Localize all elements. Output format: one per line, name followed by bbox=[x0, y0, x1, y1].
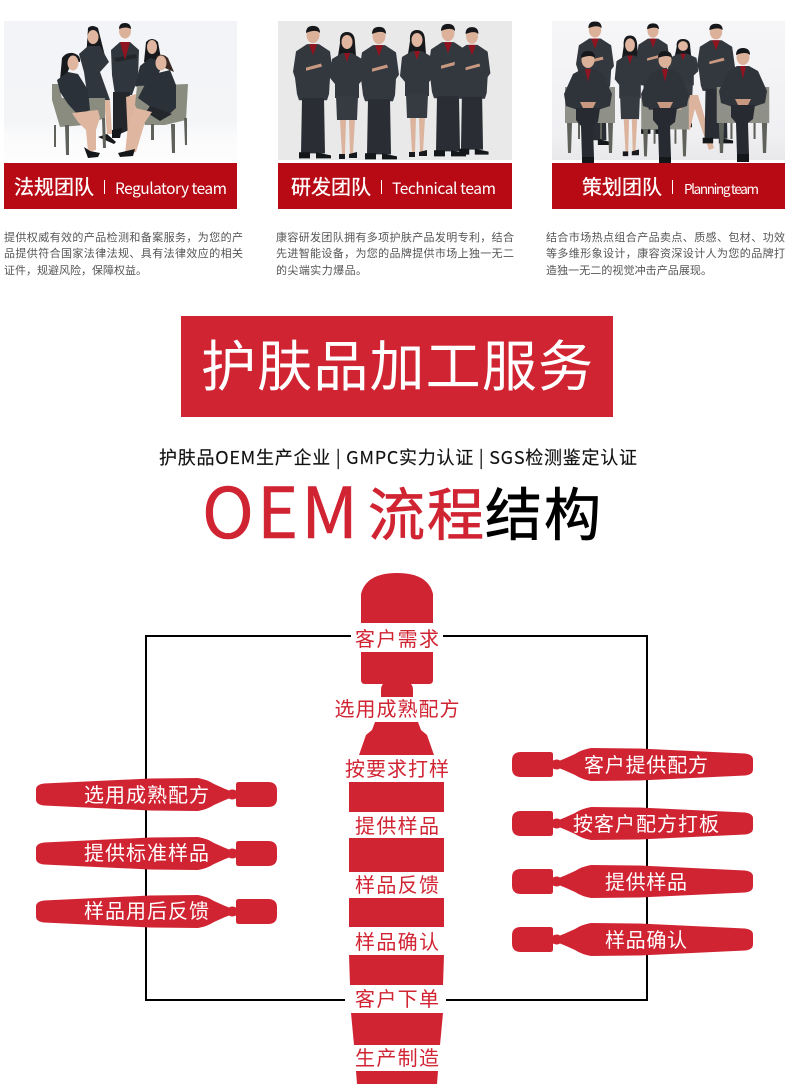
description: technical: 康容研发团队拥有多项护肤产品发明专利，结合 bbox=[276, 229, 514, 245]
pill: 样品确认: 样品确认 bbox=[605, 924, 687, 953]
central step labels: 客户下单 bbox=[355, 983, 439, 1012]
team banner: regulatory: 法规团队 bbox=[14, 171, 94, 200]
pill: 样品用后反馈: 样品用后反馈 bbox=[84, 895, 209, 924]
pill: 选用成熟配方 bbox=[36, 778, 277, 811]
description: regulatory: 品提供符合国家法律法规、具有法律效应的相关 bbox=[4, 245, 243, 261]
description: regulatory bbox=[4, 229, 243, 278]
description: regulatory: 证件，规避风险，保障权益。 bbox=[4, 262, 147, 278]
description: planning: 等多维形象设计，康容资深设计人为您的品牌打 bbox=[546, 245, 785, 261]
section title bbox=[202, 458, 601, 559]
pill: 提供标准样品: 提供标准样品 bbox=[84, 837, 209, 866]
central step labels: 提供样品 bbox=[355, 810, 439, 839]
central step labels bbox=[334, 623, 460, 1071]
pill: 按客户配方打板 bbox=[512, 807, 753, 840]
team banner: technical: Technical team bbox=[392, 177, 496, 199]
section title: OEM bbox=[202, 458, 358, 559]
heading banner: 护肤品加工服务 bbox=[201, 322, 593, 402]
pill: 客户提供配方: 客户提供配方 bbox=[584, 749, 708, 778]
description: technical bbox=[276, 229, 514, 278]
pill: 提供标准样品 bbox=[36, 837, 277, 870]
team banner: technical bbox=[278, 163, 512, 209]
central step labels: 生产制造 bbox=[355, 1042, 439, 1071]
panel: regulatory team bbox=[4, 21, 243, 278]
panel: planning team bbox=[546, 21, 785, 278]
pill: 样品确认 bbox=[512, 923, 753, 956]
pill: 提供样品: 提供样品 bbox=[605, 866, 687, 895]
description: technical: 先进智能设备，为您的品牌提供市场上独一无二 bbox=[276, 245, 514, 261]
central step labels: 选用成熟配方 bbox=[334, 693, 460, 722]
central step labels: 样品确认 bbox=[355, 926, 439, 955]
central bottle shape bbox=[349, 573, 444, 1084]
central step labels: 按要求打样 bbox=[345, 753, 449, 782]
description: regulatory: 提供权威有效的产品检测和备案服务，为您的产 bbox=[4, 229, 243, 245]
pill: 提供样品 bbox=[512, 865, 753, 898]
description: technical: 的尖端实力爆品。 bbox=[276, 262, 367, 278]
pill: 按客户配方打板: 按客户配方打板 bbox=[573, 808, 719, 837]
section title: 结构 bbox=[485, 470, 601, 552]
team banner: regulatory: Regulatory team bbox=[115, 177, 227, 199]
flowchart: OEM process bbox=[36, 573, 753, 1084]
right branch pills bbox=[512, 748, 753, 956]
description: planning: 结合市场热点组合产品卖点、质感、包材、功效 bbox=[546, 229, 785, 245]
team banner: planning: Planning team bbox=[684, 178, 759, 198]
connector frame bbox=[146, 636, 647, 1000]
team banner: planning: 策划团队 bbox=[582, 171, 662, 200]
photo: regulatory team members bbox=[4, 21, 237, 160]
description: planning bbox=[546, 229, 785, 278]
team banner: planning bbox=[552, 163, 785, 209]
subtitle: 护肤品OEM生产企业 | GMPC实力认证 | SGS检测鉴定认证 bbox=[159, 444, 637, 470]
team banner: regulatory bbox=[4, 163, 237, 209]
central step labels: 客户需求 bbox=[355, 623, 439, 652]
panel: technical team bbox=[276, 21, 514, 278]
photo: planning team members bbox=[552, 21, 785, 165]
description: planning: 造独一无二的视觉冲击产品展现。 bbox=[546, 262, 712, 278]
photo: technical team members bbox=[278, 21, 512, 160]
pill: 样品用后反馈 bbox=[36, 895, 277, 928]
section title: 流程 bbox=[368, 470, 484, 552]
pill: 选用成熟配方: 选用成熟配方 bbox=[84, 779, 209, 808]
left branch pills bbox=[36, 778, 277, 928]
team banner: technical: 研发团队 bbox=[291, 171, 371, 200]
pill: 客户提供配方 bbox=[512, 748, 753, 781]
central step labels: 样品反馈 bbox=[355, 869, 439, 898]
